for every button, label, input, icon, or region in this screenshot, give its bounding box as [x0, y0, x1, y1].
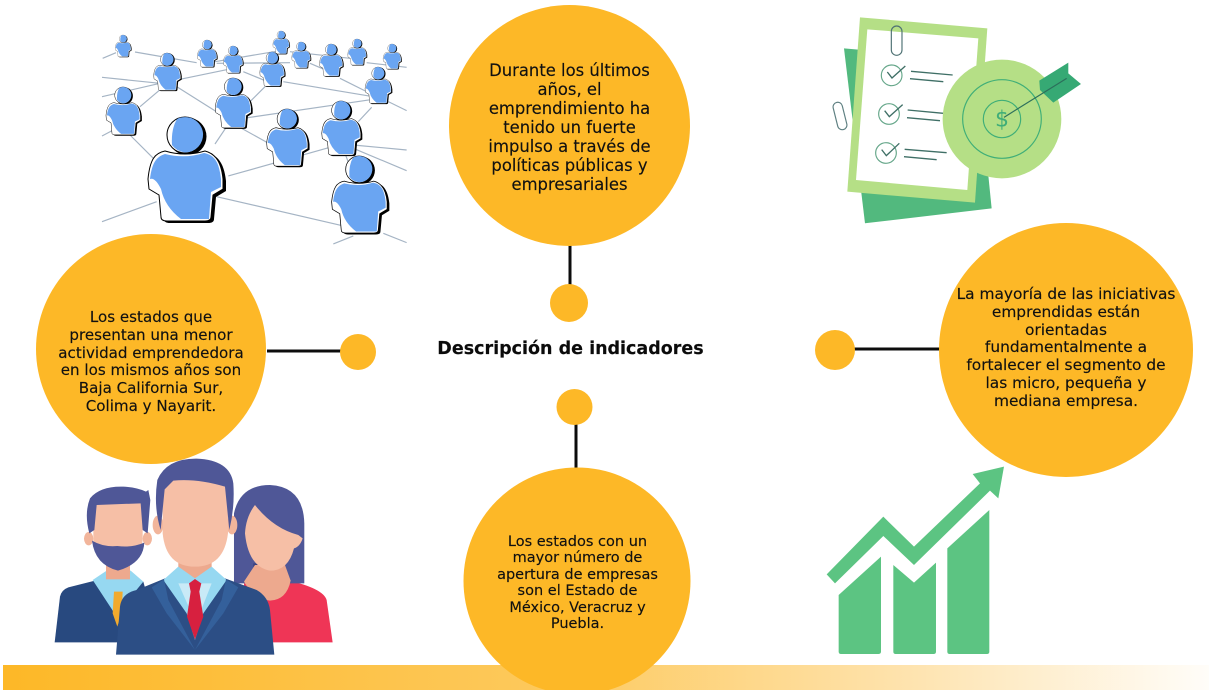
text: right circle: emprendidas están [992, 303, 1140, 321]
text: bottom circle: México, Veracruz y [509, 600, 646, 616]
text: bottom circle: Los estados con un [508, 534, 647, 550]
icon: rising bar chart with arrow [827, 467, 1004, 654]
text: left circle: Baja California Sur, [79, 379, 223, 397]
text: right circle: mediana empresa. [994, 392, 1138, 410]
left connector dot [340, 334, 376, 370]
text: left circle [58, 308, 244, 415]
icon: checklist with target: $ [995, 108, 1009, 133]
title: Descripción de indicadores [437, 339, 704, 359]
text: top circle: emprendimiento ha [489, 99, 650, 118]
icon: network of people [102, 31, 407, 244]
top circle [449, 5, 690, 246]
text: bottom circle: mayor número de [513, 550, 642, 566]
text: top circle: empresariales [511, 175, 628, 194]
connector lines [267, 240, 945, 472]
text: right circle: las micro, pequeña y [986, 374, 1146, 392]
top connector dot [550, 284, 588, 322]
text: top circle: políticas públicas y [491, 156, 648, 175]
left circle [36, 234, 266, 464]
icon: team of business people [55, 459, 333, 655]
text: left circle: Colima y Nayarit. [86, 397, 216, 415]
text: top circle: tenido un fuerte [503, 118, 636, 137]
text: left circle: en los mismos años son [61, 361, 241, 379]
text: right circle: fortalecer el segmento de [966, 356, 1166, 374]
bottom gradient band [3, 665, 1209, 690]
text: right circle: fundamentalmente a [985, 338, 1147, 356]
right circle [939, 223, 1193, 477]
right connector dot [815, 330, 855, 370]
text: top circle: impulso a través de [488, 137, 651, 156]
bottom connector dot [556, 389, 592, 425]
text: right circle: orientadas [1025, 321, 1107, 339]
text: right circle [957, 285, 1175, 410]
text: right circle: La mayoría de las iniciativas [957, 285, 1175, 303]
text: bottom circle: apertura de empresas [497, 567, 658, 583]
text: top circle [488, 61, 651, 194]
text: left circle: presentan una menor [69, 326, 233, 344]
text: left circle: actividad emprendedora [58, 344, 244, 362]
text: top circle: años, el [537, 80, 602, 99]
icon: checklist with target [832, 17, 1081, 223]
text: top circle: Durante los últimos [489, 61, 650, 80]
text: bottom circle: Puebla. [551, 616, 604, 632]
text: bottom circle: son el Estado de [518, 583, 637, 599]
bottom circle [464, 468, 690, 690]
text: bottom circle [497, 534, 658, 632]
text: left circle: Los estados que [90, 308, 212, 326]
